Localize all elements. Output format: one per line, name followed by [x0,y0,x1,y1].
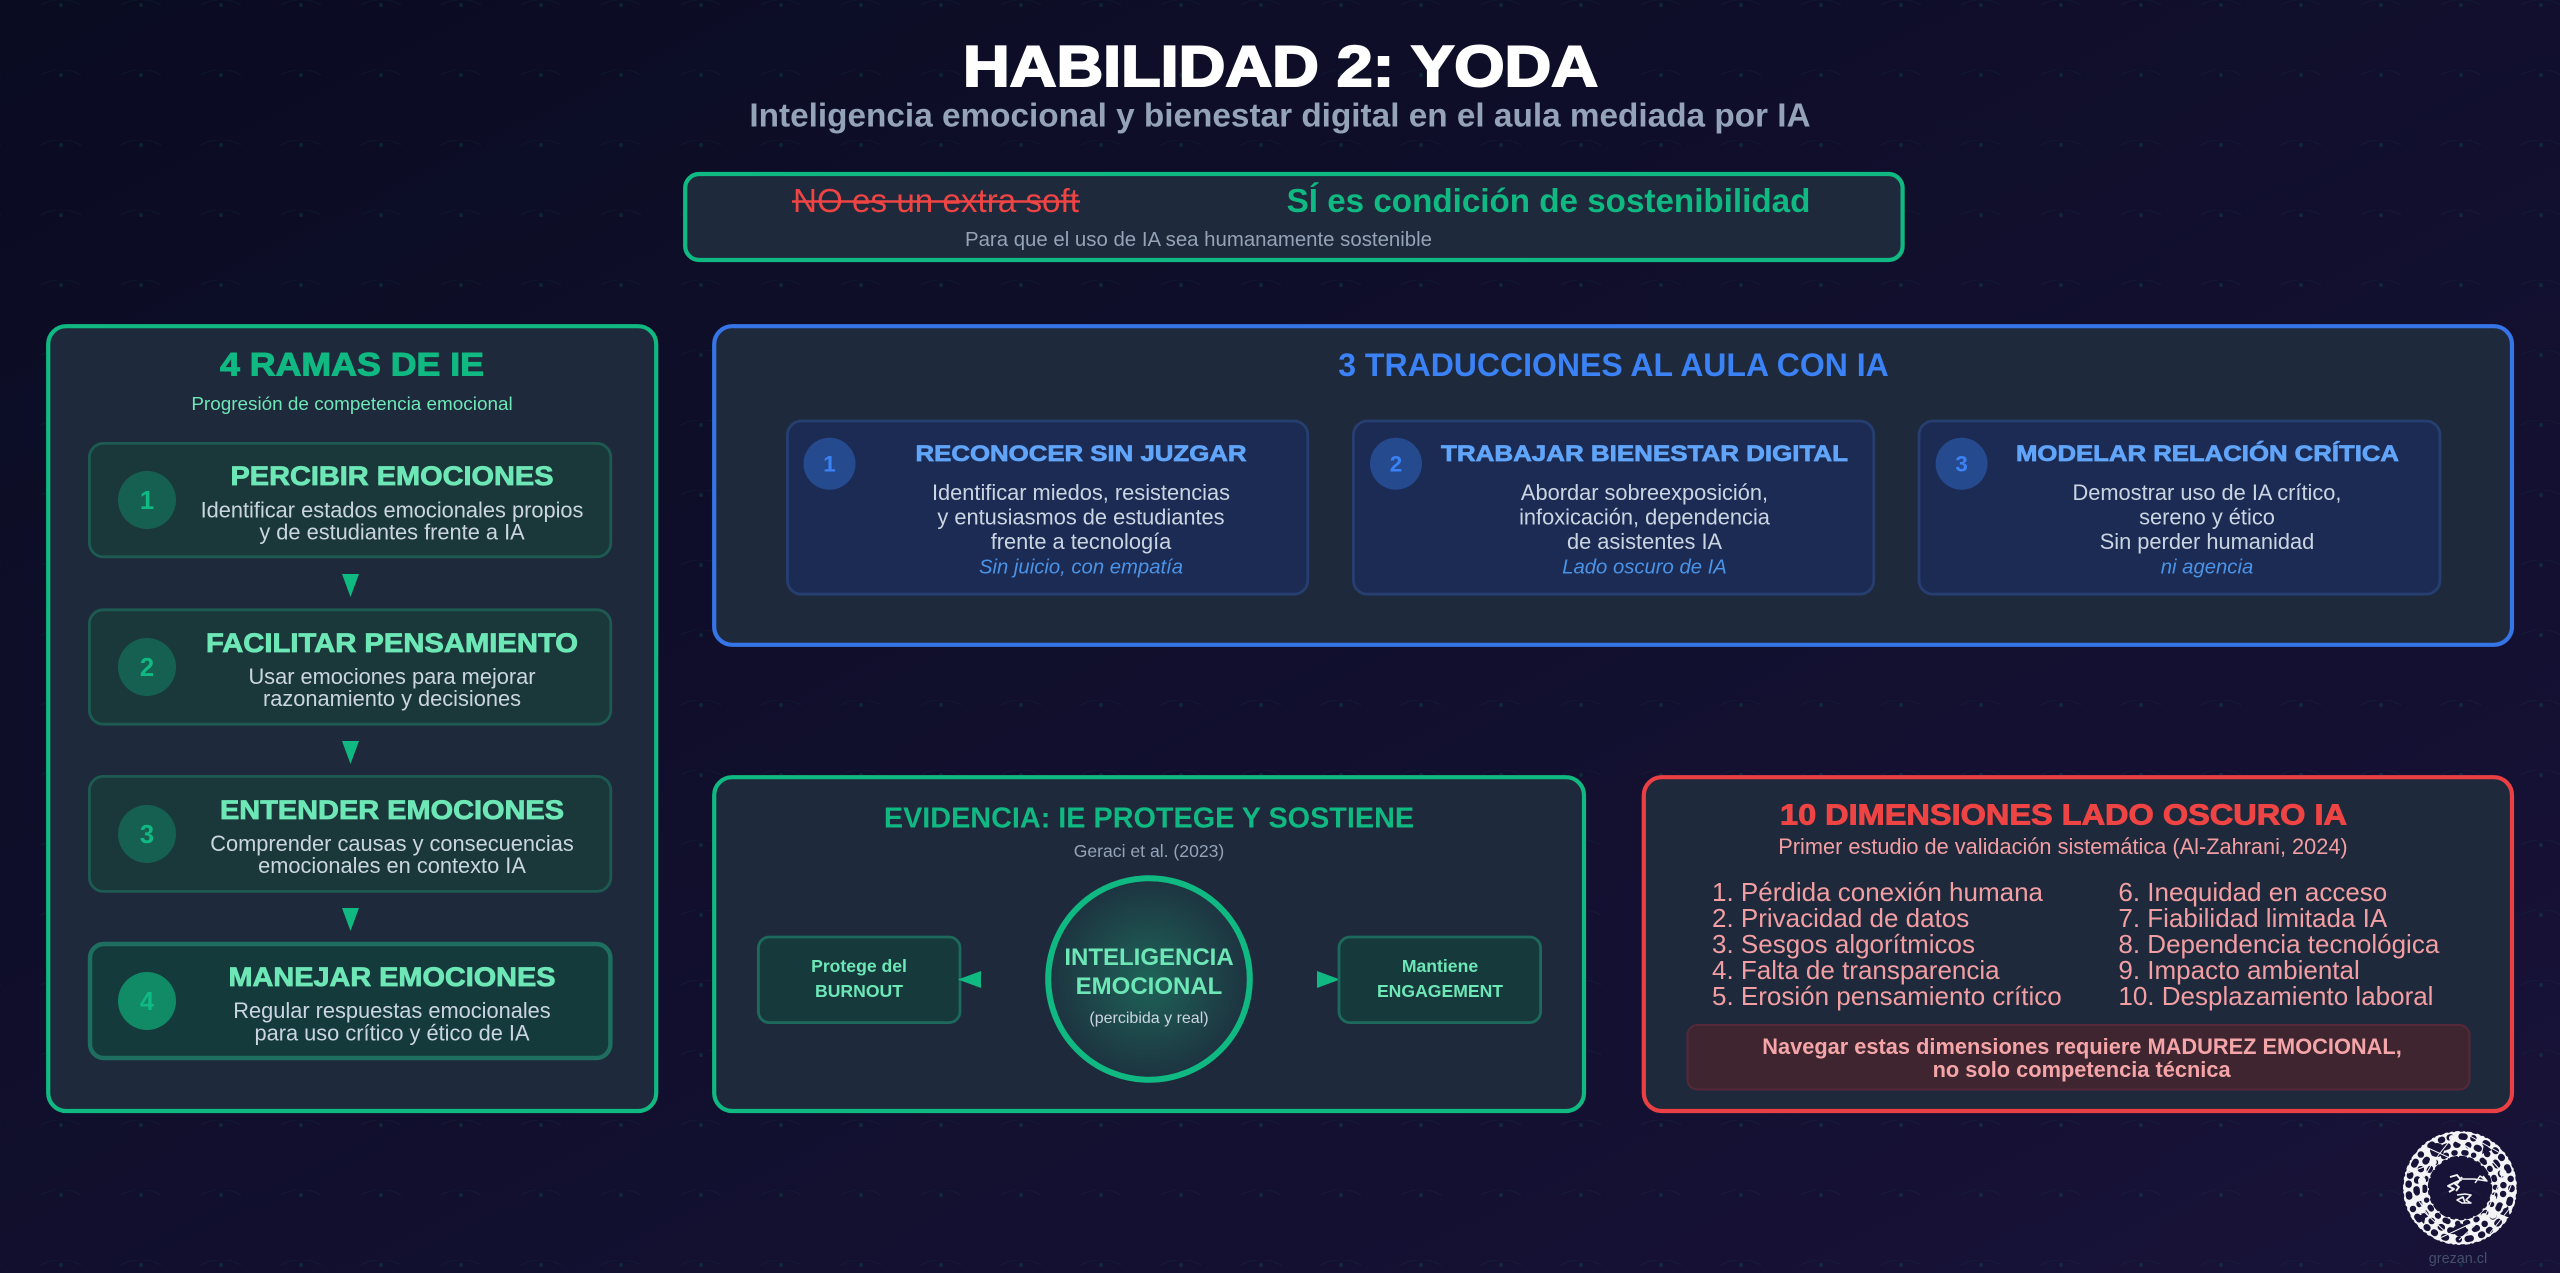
list column 2 [2118,877,2440,1011]
heading: EVIDENCIA: IE PROTEGE Y SOSTIENE [884,803,1414,835]
number badge 1: 1 [140,487,154,515]
list column 2: 6. Inequidad en acceso [2118,877,2387,907]
step title: MANEJAR EMOCIONES [228,962,556,992]
step description [210,831,574,878]
panel: evidencia [714,777,1584,1111]
subheading: Primer estudio de validación sistemática (Al-Zahrani, 2024) [1778,834,2348,859]
banner: not soft, sustainability [685,174,1903,260]
list column 1 [1712,877,2062,1011]
step 1: percibir [89,443,611,557]
panel: 10 dimensiones [1644,777,2512,1111]
card description: Abordar sobreexposición, [1521,480,1768,505]
list column 2: 9. Impacto ambiental [2118,955,2360,985]
card description: Demostrar uso de IA crítico, [2073,480,2341,505]
callout: madurez emocional: Navegar estas dimensiones requiere MADUREZ EMOCIONAL, [1762,1034,2402,1059]
list column 2: 8. Dependencia tecnológica [2118,929,2440,959]
heading: 10 DIMENSIONES LADO OSCURO IA [1780,800,2347,832]
step description: Regular respuestas emocionales [233,998,551,1023]
box: engagement: Mantiene [1402,956,1478,976]
list column 1: 2. Privacidad de datos [1712,903,1969,933]
number badge 3: 3 [1955,452,1968,476]
step 4: manejar [90,944,610,1058]
step 3: entender [89,776,611,891]
arrow down [342,908,359,931]
arrow down [342,741,359,764]
arrow right [1317,971,1340,988]
step description: Comprender causas y consecuencias [210,831,574,856]
step title: ENTENDER EMOCIONES [220,795,564,825]
card description: sereno y ético [2139,504,2275,530]
card description [932,480,1230,554]
card description [2073,480,2341,554]
number badge 2: 2 [1390,452,1402,476]
number badge 4: 4 [140,988,155,1016]
card description [1519,480,1771,554]
step description: Usar emociones para mejorar [248,664,536,689]
list column 1: 5. Erosión pensamiento crítico [1712,981,2062,1011]
number badge 2 [118,638,176,696]
step title: FACILITAR PENSAMIENTO [206,628,578,658]
number badge 3: 3 [140,821,154,849]
heading: 4 RAMAS DE IE [220,347,484,383]
arrow left [958,971,981,988]
icon: grezan logo [2402,1130,2518,1246]
step description: Identificar estados emocionales propios [201,498,584,522]
logo caption: grezan.cl [2429,1251,2487,1267]
central circle: inteligencia emocional: EMOCIONAL [1076,973,1222,1000]
card description: infoxicación, dependencia [1519,504,1771,530]
number badge 3 [118,805,176,863]
list column 1: 1. Pérdida conexión humana [1712,877,2044,907]
number badge 1 [118,471,176,529]
card description: frente a tecnología [991,529,1172,554]
citation: Geraci et al. (2023) [1074,841,1224,861]
callout: madurez emocional [1688,1025,2470,1090]
card title: RECONOCER SIN JUZGAR [916,441,1246,466]
card 2: bienestar digital [1353,421,1874,594]
step description [201,498,584,544]
callout: madurez emocional: no solo competencia técnica [1933,1057,2231,1082]
step description [233,998,551,1046]
box: engagement: ENGAGEMENT [1377,981,1503,1001]
heading: 3 TRADUCCIONES AL AULA CON IA [1338,347,1889,383]
card note: Sin juicio, con empatía [979,556,1183,578]
list column 2: 10. Desplazamiento laboral [2118,981,2433,1011]
subtitle: Inteligencia emocional y bienestar digital en el aula mediada por IA [749,98,1811,134]
central circle: inteligencia emocional: (percibida y real) [1089,1010,1209,1027]
list column 1: 3. Sesgos algorítmicos [1712,929,1975,959]
title: HABILIDAD 2: YODA [963,35,1598,99]
panel: 4 ramas de IE [48,326,656,1111]
step description: razonamiento y decisiones [263,686,521,711]
step 2: facilitar [89,610,611,724]
number badge 2: 2 [140,654,154,682]
card title: TRABAJAR BIENESTAR DIGITAL [1441,441,1848,466]
step description: y de estudiantes frente a IA [259,520,525,544]
card description: Identificar miedos, resistencias [932,480,1230,505]
box: burnout: BURNOUT [815,981,903,1001]
card description: Sin perder humanidad [2100,529,2314,554]
affirmative statement: SÍ es condición de sostenibilidad [1287,182,1810,220]
card 1: reconocer [787,421,1308,594]
crossed-out statement: NO es un extra soft [793,183,1079,220]
list column 2: 7. Fiabilidad limitada IA [2118,903,2388,933]
panel subheading: Progresión de competencia emocional [191,394,513,415]
central circle: inteligencia emocional [1048,878,1250,1080]
number badge 3 [1936,438,1988,490]
step description: emocionales en contexto IA [258,853,526,878]
card title: MODELAR RELACIÓN CRÍTICA [2016,441,2399,466]
number badge 1: 1 [823,452,836,476]
list column 1: 4. Falta de transparencia [1712,955,2000,985]
number badge 4 [118,972,176,1030]
step description [248,664,536,711]
arrow down [342,574,359,597]
step description: para uso crítico y ético de IA [254,1020,530,1046]
card description: y entusiasmos de estudiantes [937,504,1225,530]
box: burnout [758,937,960,1023]
card 3: modelar relación [1919,421,2440,594]
card note: ni agencia [2161,556,2253,578]
number badge 1 [804,438,856,490]
box: engagement [1339,937,1541,1023]
number badge 2 [1370,438,1422,490]
central circle: inteligencia emocional: INTELIGENCIA [1064,944,1234,971]
banner caption: Para que el uso de IA sea humanamente sostenible [965,229,1432,251]
step title: PERCIBIR EMOCIONES [230,461,554,491]
box: burnout: Protege del [811,956,907,976]
panel: 3 traducciones [714,326,2512,645]
card description: de asistentes IA [1567,529,1723,554]
card note: Lado oscuro de IA [1562,556,1727,578]
